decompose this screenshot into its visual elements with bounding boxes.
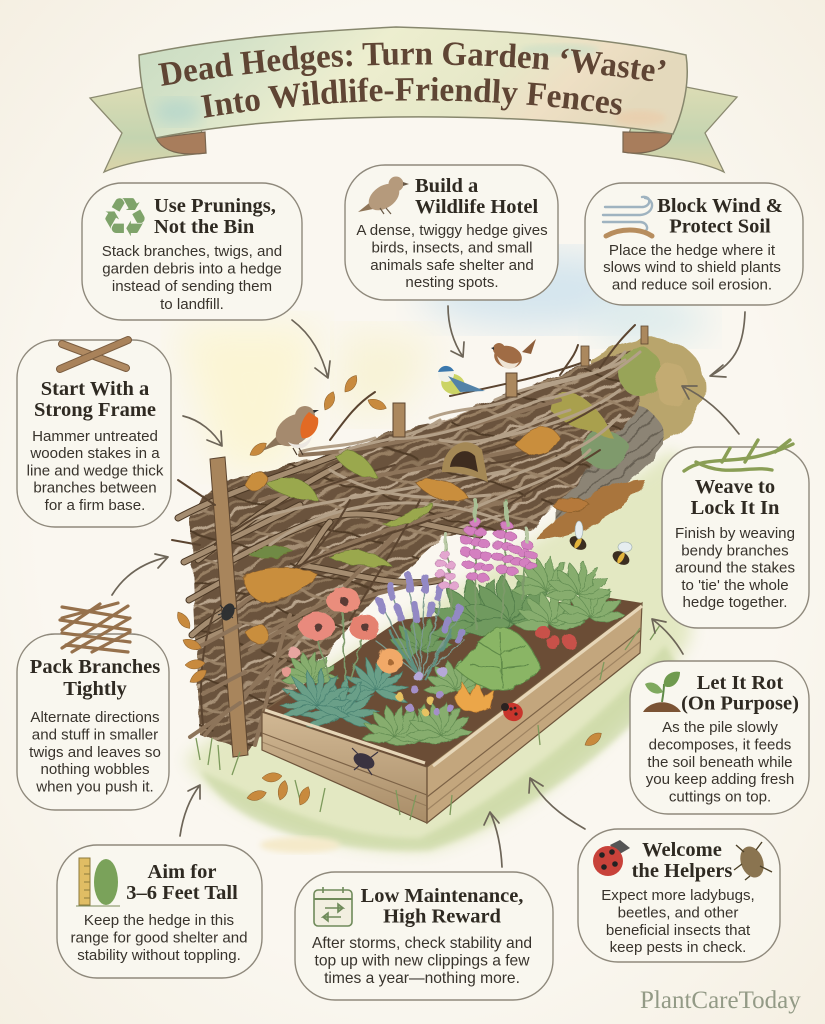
poppies	[282, 587, 403, 680]
heading: (On Purpose)	[681, 692, 799, 714]
arrow: low maintenance	[484, 812, 502, 867]
lavender	[375, 575, 465, 680]
hedge right bushy end	[555, 338, 704, 520]
text block: As the pile slowly	[662, 719, 778, 736]
title text: Into Wildlife-Friendly Fences	[200, 77, 622, 118]
icon: ruler and bush	[76, 858, 120, 906]
heading: High Reward	[383, 906, 502, 928]
ground details: fallen leaves	[246, 730, 604, 807]
arrows	[112, 306, 745, 867]
wooden stakes	[210, 326, 648, 757]
woven branches: thick	[178, 450, 480, 645]
text block: Expect more ladybugs,	[601, 887, 755, 904]
text block: top up with new clippings a few	[315, 952, 530, 970]
wren	[491, 339, 536, 371]
icon: wind and soil	[603, 197, 652, 236]
text block: birds, insects, and small	[371, 239, 533, 256]
heading: Welcome	[642, 839, 722, 861]
text block: garden debris into a hedge	[102, 261, 282, 278]
arrow: block wind	[710, 312, 745, 377]
arrow: wildlife hotel	[448, 306, 464, 357]
text block: Finish by weaving	[675, 525, 795, 542]
text block: times a year—nothing more.	[324, 970, 520, 987]
panel: aim for height	[57, 845, 262, 978]
heading: Block Wind &	[657, 195, 783, 217]
heading: Wildlife Hotel	[415, 196, 538, 218]
heading: Weave to	[695, 476, 775, 498]
text block: line and wedge thick	[27, 462, 164, 479]
icon: bird	[358, 176, 409, 216]
icon: calendar	[314, 887, 352, 926]
heading: Low Maintenance,	[361, 885, 523, 907]
text block: and stuff in smaller	[32, 726, 158, 743]
plants	[280, 498, 625, 745]
heading: Not the Bin	[154, 216, 255, 238]
illustration: dead hedge	[172, 325, 704, 757]
front rails	[172, 480, 245, 737]
text block: nesting spots.	[405, 274, 499, 291]
heading: Protect Soil	[669, 216, 771, 238]
heading: Tightly	[63, 678, 127, 700]
hedge body	[190, 350, 640, 753]
icon: bendy twigs	[684, 440, 793, 471]
text block: hedge together.	[683, 594, 787, 611]
text block: cuttings on top.	[669, 789, 771, 806]
bed left side	[262, 712, 427, 823]
ladybird	[500, 700, 526, 724]
grass tufts around bed	[196, 625, 660, 820]
heading: Build a	[415, 175, 478, 197]
sky and sunlight wash	[175, 252, 710, 470]
bed soil	[262, 597, 642, 767]
text block: when you push it.	[35, 779, 154, 796]
arrow: aim	[180, 785, 200, 836]
text block: and reduce soil erosion.	[612, 276, 772, 293]
text block: After storms, check stability and	[312, 935, 532, 952]
title text	[158, 42, 666, 118]
text block: twigs and leaves so	[29, 744, 161, 761]
icon: sprout on soil	[643, 672, 681, 712]
autumn leaves at left	[175, 373, 388, 685]
bottom flowers	[396, 667, 494, 716]
heading: Let It Rot	[697, 672, 783, 694]
hedge hole	[442, 442, 488, 482]
arrow: pack branches	[112, 554, 168, 595]
arrow: weave	[682, 386, 739, 434]
text block: around the stakes	[675, 560, 795, 577]
heading: Pack Branches	[30, 656, 160, 678]
text block: bendy branches	[681, 542, 789, 559]
text block: slows wind to shield plants	[603, 259, 781, 276]
text block: Stack branches, twigs, and	[102, 243, 282, 260]
foliage	[280, 556, 625, 745]
heading: Use Prunings,	[154, 195, 276, 217]
icon: beetle	[734, 842, 772, 881]
hedge cross twigs texture	[190, 350, 640, 753]
text block: to 'tie' the whole	[681, 577, 789, 594]
icon: stacked branches	[60, 603, 130, 652]
beetle on bed	[351, 748, 378, 775]
text block: beetles, and other	[618, 904, 738, 921]
title banner	[88, 26, 738, 174]
text block: instead of sending them	[112, 278, 272, 295]
icon: recycle: ♻	[101, 186, 149, 249]
text block: the soil beneath while	[647, 754, 793, 771]
arrow: helpers	[529, 778, 585, 829]
arrow: let it rot	[652, 619, 683, 654]
title text: Dead Hedges: Turn Garden ‘Waste’	[158, 42, 666, 86]
heading: Start With a	[41, 378, 149, 400]
bed top rim and planks	[262, 606, 642, 823]
text block: nothing wobbles	[40, 761, 150, 778]
text block: Place the hedge where it	[609, 242, 775, 259]
banner right tail	[623, 87, 737, 172]
blue tit	[438, 366, 485, 398]
panel: strong frame	[17, 340, 171, 527]
icon: crossed stakes	[60, 340, 128, 369]
text block: keep pests in check.	[610, 939, 746, 956]
heading: Lock It In	[691, 497, 780, 519]
text block: to landfill.	[160, 296, 224, 313]
dead leaves	[243, 427, 590, 644]
banner watercolour blotches	[154, 44, 666, 126]
panel: let it rot	[630, 661, 809, 814]
big leafy plant	[455, 628, 540, 690]
heading: Strong Frame	[34, 399, 156, 421]
beetle on stake	[218, 601, 237, 623]
banner left fold	[156, 132, 206, 154]
text block: Keep the hedge in this	[84, 912, 234, 929]
text block: beneficial insects that	[606, 922, 751, 939]
panel: weave	[662, 440, 809, 628]
panel: use prunings	[82, 183, 302, 320]
text block: Alternate directions	[30, 709, 160, 726]
banner right fold	[623, 132, 672, 153]
arrow: strong frame	[183, 416, 222, 446]
brand logo: PlantCareToday	[640, 987, 801, 1014]
raised garden bed	[196, 498, 660, 823]
heading: the Helpers	[632, 860, 732, 882]
bees	[567, 521, 632, 568]
text block: animals safe shelter and	[370, 257, 534, 274]
text block: A dense, twiggy hedge gives	[356, 222, 548, 239]
icon: ladybird	[593, 840, 630, 876]
text block: Hammer untreated	[32, 428, 158, 445]
panel: wildlife hotel	[345, 165, 558, 300]
banner body	[139, 27, 687, 138]
heading: 3–6 Feet Tall	[126, 882, 238, 904]
text block: wooden stakes in a	[29, 445, 160, 462]
text block: decomposes, it feeds	[649, 736, 791, 753]
panel: block wind	[585, 183, 803, 305]
robin	[262, 406, 319, 455]
text block: branches between	[33, 480, 157, 497]
radishes	[535, 625, 577, 649]
text block: you keep adding fresh	[646, 771, 794, 788]
foxgloves	[434, 498, 537, 630]
panel: low maintenance	[295, 872, 553, 1000]
moss patches	[248, 451, 432, 566]
banner left tail	[90, 87, 206, 172]
panel: pack branches	[17, 603, 169, 810]
arrow: prunings	[292, 320, 330, 378]
hedge right end clumps	[535, 348, 688, 540]
heading: Aim for	[148, 861, 216, 883]
ground wash	[185, 450, 700, 853]
text block: range for good shelter and	[70, 930, 248, 946]
text block: stability without toppling.	[77, 947, 241, 964]
bed right side	[427, 603, 642, 823]
text block: for a firm base.	[45, 497, 145, 514]
panel: welcome helpers	[578, 829, 780, 962]
woven branches: medium	[205, 325, 640, 745]
